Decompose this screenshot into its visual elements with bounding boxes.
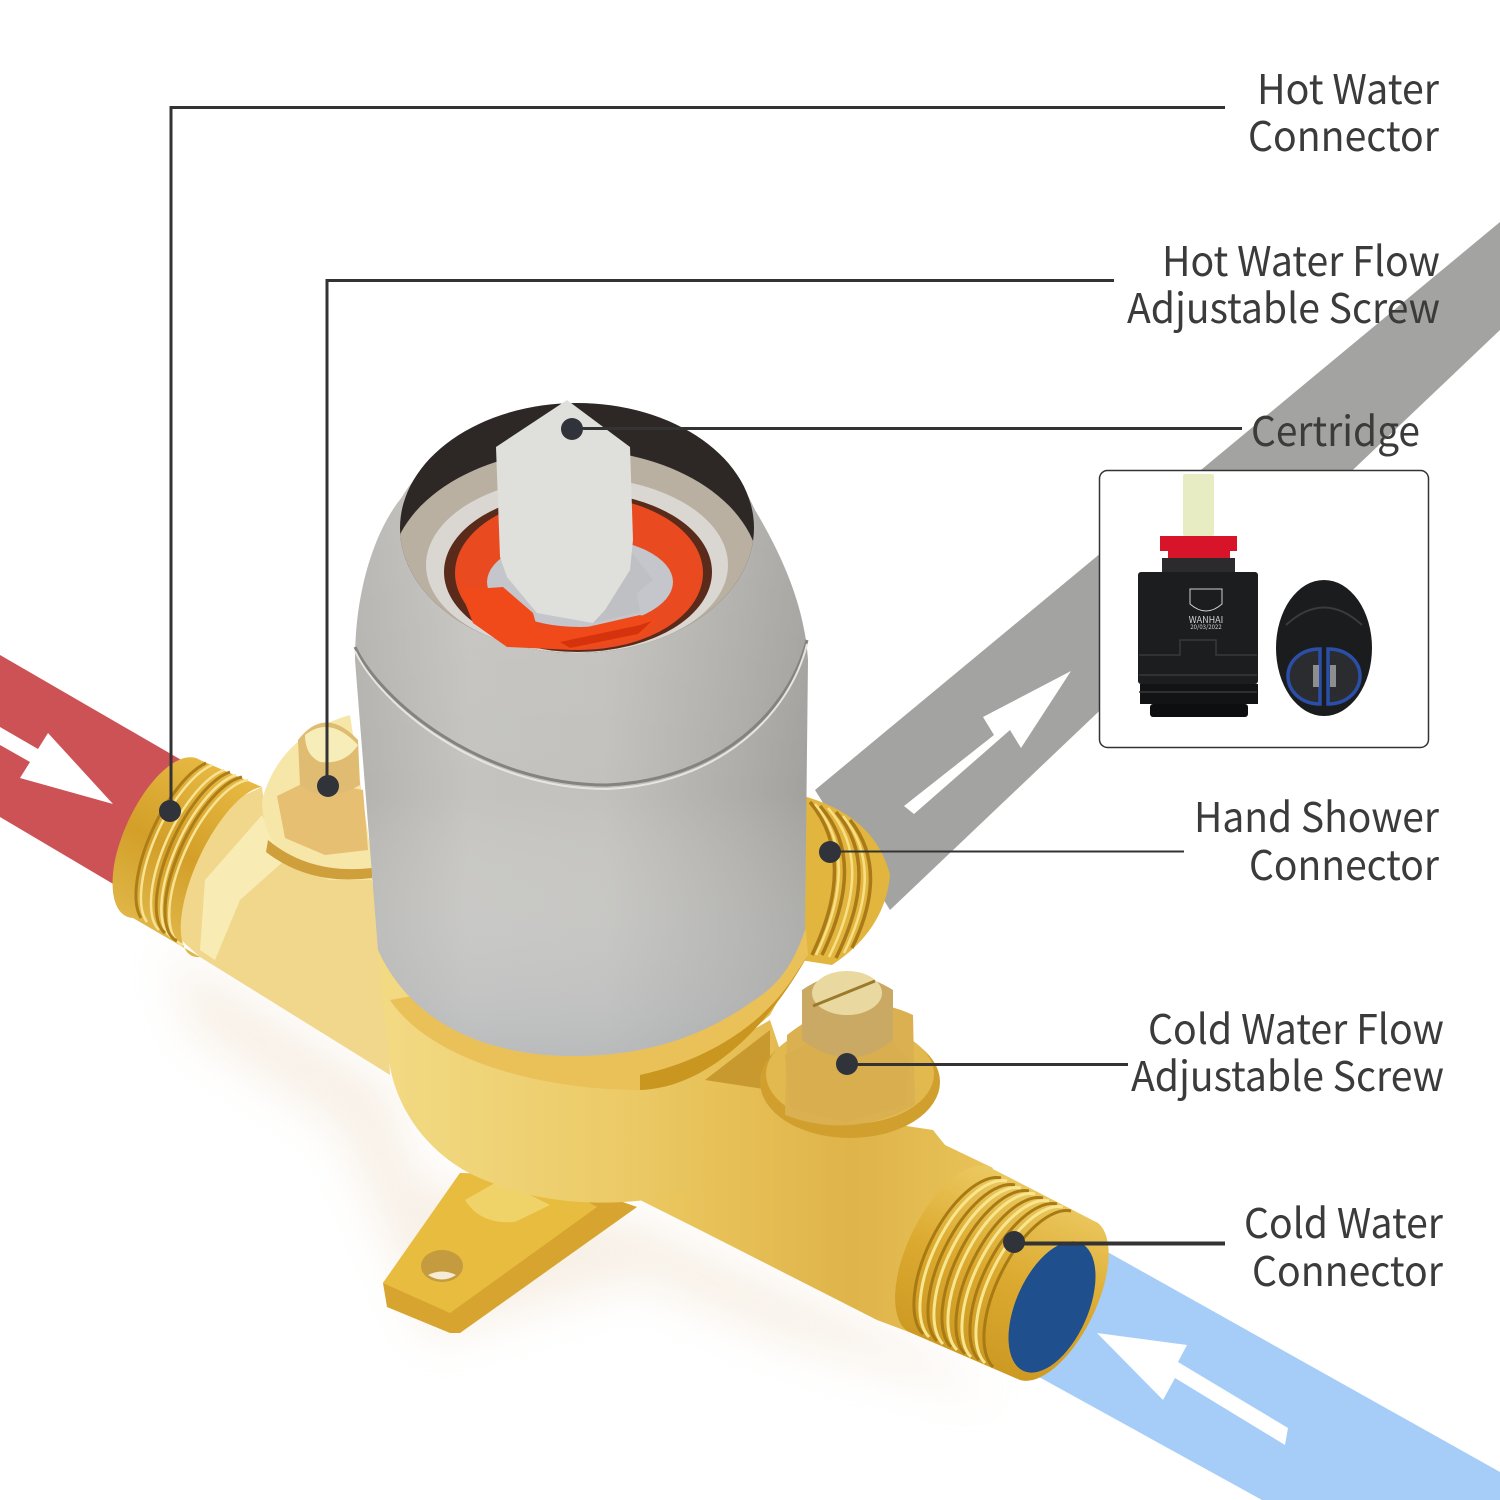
callout: cold water connector xyxy=(1003,1190,1443,1298)
cartridge side view: 20/03/2022 xyxy=(1190,622,1222,631)
cold water connector thread xyxy=(895,1166,1113,1386)
callout: cold water flow screw: Cold Water Flow xyxy=(1148,996,1444,1056)
callout: hot water connector xyxy=(159,56,1439,822)
hot water connector thread xyxy=(113,757,262,957)
cold water adjusting screw xyxy=(760,971,940,1138)
band: cold water flow xyxy=(1030,1245,1500,1500)
cartridge stem xyxy=(496,400,633,623)
cartridge base view xyxy=(1276,580,1372,716)
arrow: cold water direction xyxy=(1097,1333,1288,1445)
hot pipe highlight xyxy=(200,815,285,960)
callout: cold water flow screw xyxy=(836,996,1444,1103)
cartridge cross piece xyxy=(593,550,653,623)
brass collar band xyxy=(390,930,808,1090)
panel: cartridge inset xyxy=(1100,470,1428,748)
cartridge side view xyxy=(1138,474,1258,717)
screw recess shade xyxy=(705,1030,770,1090)
callout: hot water flow screw xyxy=(317,228,1440,797)
cold side pipe xyxy=(640,1020,993,1332)
callout: cartridge xyxy=(561,398,1420,458)
callout: hot water flow screw: Adjustable Screw xyxy=(1127,275,1440,335)
arrow: hand shower direction xyxy=(904,671,1071,814)
soft shadow under valve xyxy=(170,950,1000,1400)
orange cartridge clip xyxy=(460,587,657,650)
callout: cartridge: Certridge xyxy=(1251,398,1420,458)
callout: hot water connector: Hot Water xyxy=(1257,56,1439,116)
callout: cold water connector: Connector xyxy=(1252,1238,1443,1298)
callout: hot water connector: Connector xyxy=(1248,103,1439,163)
steel valve housing xyxy=(355,403,808,1056)
callout: hand shower connector xyxy=(819,784,1439,892)
callout: cold water flow screw: Adjustable Screw xyxy=(1131,1043,1444,1103)
hot side pipe xyxy=(170,787,390,1075)
callout: hand shower connector: Hand Shower xyxy=(1194,784,1439,844)
valve illustration xyxy=(113,400,1113,1386)
callout: hot water flow screw: Hot Water Flow xyxy=(1162,228,1440,288)
callout: cold water connector: Cold Water xyxy=(1244,1190,1443,1250)
hand shower connector thread xyxy=(800,795,890,965)
collar shaded edge xyxy=(640,955,808,1090)
valve lower brass body xyxy=(378,950,806,1203)
hot water adjusting screw xyxy=(262,715,375,880)
mounting bracket xyxy=(383,1173,637,1333)
callout: hand shower connector: Connector xyxy=(1249,832,1439,892)
cartridge side view: WANHAI xyxy=(1189,613,1223,626)
housing opening xyxy=(400,403,754,653)
arrow: hot water direction xyxy=(0,727,113,804)
band: hot water flow xyxy=(0,655,190,888)
band: hand shower flow xyxy=(815,222,1500,910)
